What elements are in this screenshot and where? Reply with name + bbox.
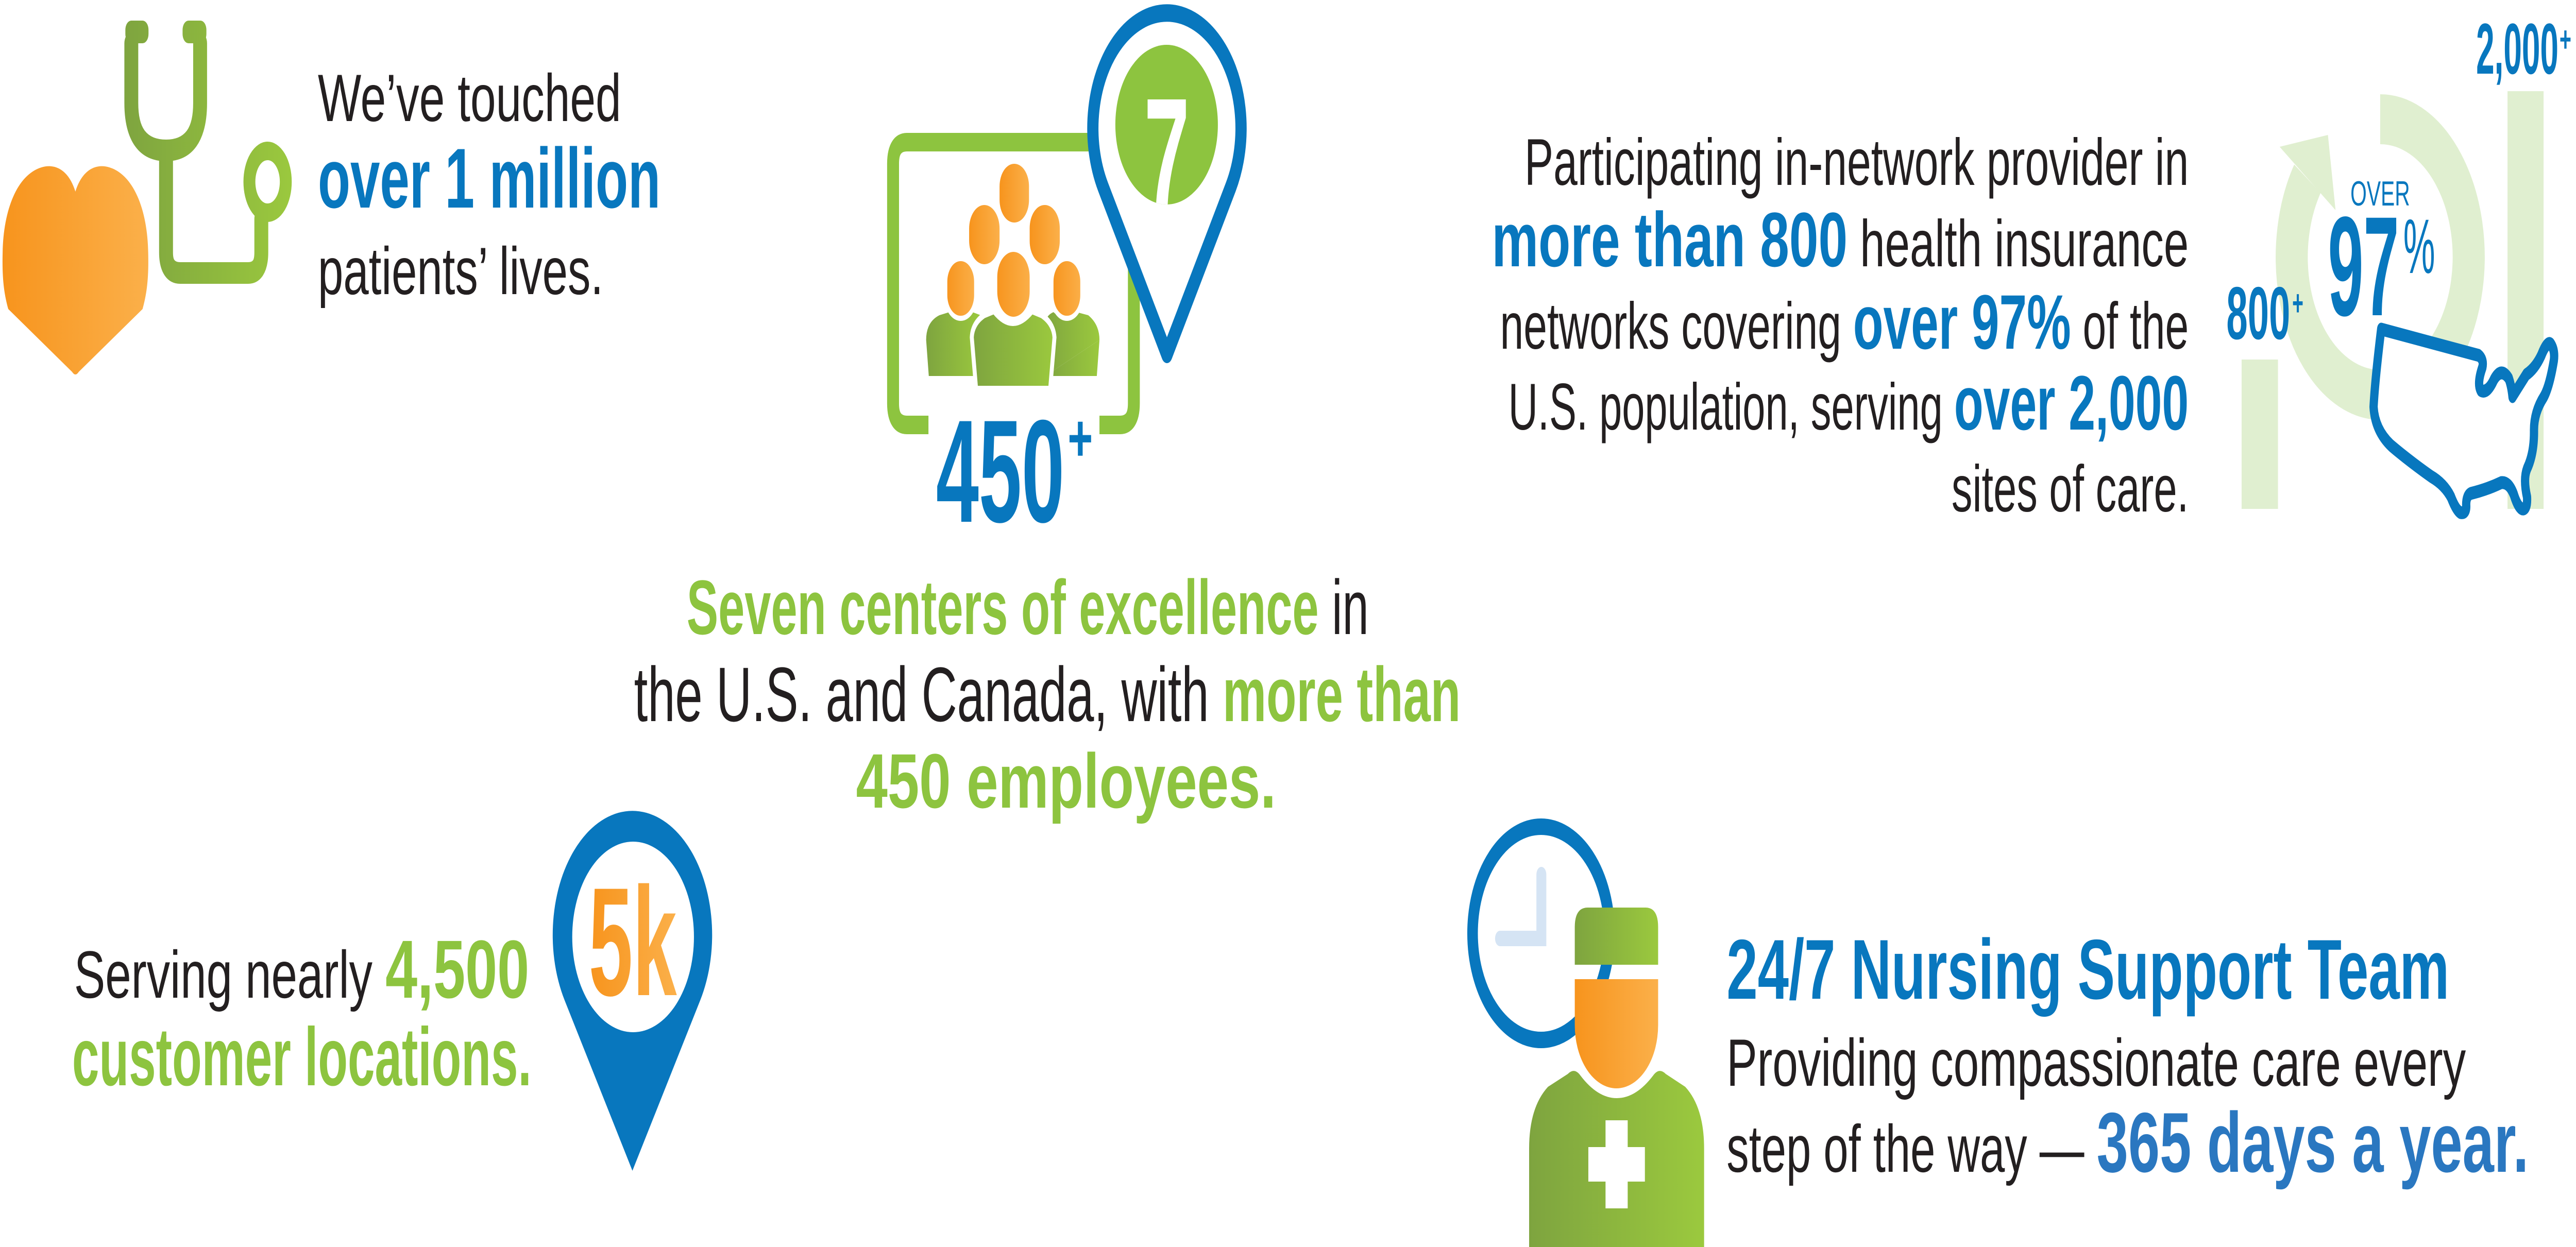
label 800+: 800 [2226,271,2290,355]
pin 7 [1093,13,1241,354]
text: insurance networks: more than 800 health insurance [1492,196,2189,283]
icon: pin 5k: 5k [589,856,677,1028]
text: patients touched: patients’ lives. [318,234,603,309]
text: insurance networks: U.S. population, serving over 2,000 [1509,360,2189,446]
icon: nurse with clock [1472,827,1704,1247]
label over 97%: 97 [2328,187,2399,345]
arrow ring [2292,119,2469,395]
icon: employees frame with people and pin 7 [893,13,1241,553]
text: seven centers of excellence: the U.S. and Canada, with more than [634,651,1461,738]
frame [893,142,1134,425]
text: insurance networks: networks covering over 97% of the [1500,279,2189,365]
nurse [1575,908,1658,965]
people group [926,164,1099,389]
text: patients touched: over 1 million [318,131,660,226]
label 2,000+: + [2560,20,2571,59]
clock [1472,827,1609,1040]
bars [2242,360,2278,509]
icon: US map [2374,329,2554,513]
text: nursing support team: Providing compassionate care every [1726,1026,2466,1101]
text: nursing support team [1726,922,2529,1190]
icon: heart and stethoscope [3,21,286,374]
text: insurance networks: Participating in-network provider in [1524,126,2189,199]
label over 97%: % [2403,203,2435,289]
text: seven centers of excellence: Seven centers of excellence in [687,564,1369,651]
text: nursing support team: step of the way — 365 days a year. [1726,1095,2529,1190]
text: customer locations: customer locations. [72,1011,532,1103]
text: patients touched: We’ve touched [318,61,621,136]
text: insurance networks [1492,126,2189,525]
text: seven centers of excellence: 450 employees. [856,738,1276,824]
text: customer locations [72,924,532,1103]
icon: stethoscope [125,21,286,273]
text: customer locations: Serving nearly 4,500 [74,924,529,1016]
text: seven centers of excellence [634,564,1461,824]
icon: heart [3,166,148,374]
text: patients touched [318,61,660,309]
pin 7: 7 [1144,62,1190,252]
number 450+: 450 [936,389,1064,553]
label 800+: + [2292,283,2303,323]
number 450+: + [1067,401,1093,476]
text: insurance networks: sites of care. [1952,452,2189,525]
label over 97%: OVER [2350,174,2410,213]
icon: pin 5k [553,811,712,1171]
text: nursing support team: 24/7 Nursing Support Team [1726,922,2449,1017]
chart: coverage graphic with bars, arrow ring and US map [2226,9,2571,513]
